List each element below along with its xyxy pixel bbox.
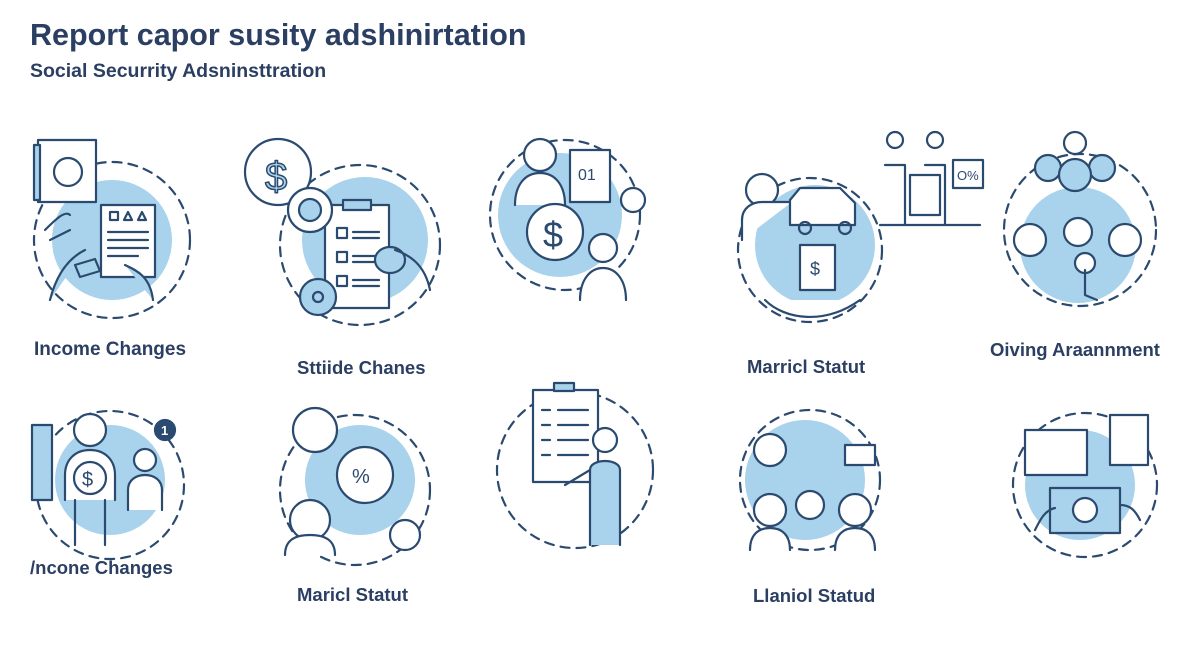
icon: income changes 2: $: [82, 469, 93, 491]
label: marricl statut: Marricl Statut: [747, 356, 865, 377]
label: oiving araannment: Oiving Araannment: [990, 339, 1160, 360]
icon: income changes 2: [32, 411, 184, 559]
label: income changes: Income Changes: [34, 339, 186, 360]
label: maricl statut: Maricl Statut: [297, 584, 408, 605]
icon: settings person: [280, 408, 430, 565]
icon: settings person: %: [352, 466, 370, 488]
icon: marital status: $: [810, 259, 820, 279]
title: Report capor susity adshinirtation: [30, 18, 527, 52]
subtitle: Social Securrity Adsninsttration: [30, 60, 326, 82]
icon: marital status: [738, 132, 983, 322]
icon: marital status: O%: [957, 168, 979, 183]
icon: stiide changes: [245, 139, 440, 325]
icon: people money: $: [543, 214, 563, 255]
icon: income changes: [34, 140, 190, 318]
icon: people money: 01: [578, 167, 596, 184]
icon: people money: [490, 139, 645, 300]
icon: checklist: [497, 383, 653, 548]
label: stiide chanes: Sttiide Chanes: [297, 357, 426, 378]
icon: giving arrangement: [1004, 132, 1156, 306]
icon: laptop hands: [1013, 413, 1157, 557]
label: ncone changes: /ncone Changes: [30, 557, 173, 578]
icon: stiide changes: $: [265, 155, 287, 199]
icon: group: [740, 410, 880, 550]
label: llaniol statud: Llaniol Statud: [753, 585, 875, 606]
icon: income changes 2: 1: [161, 423, 168, 438]
